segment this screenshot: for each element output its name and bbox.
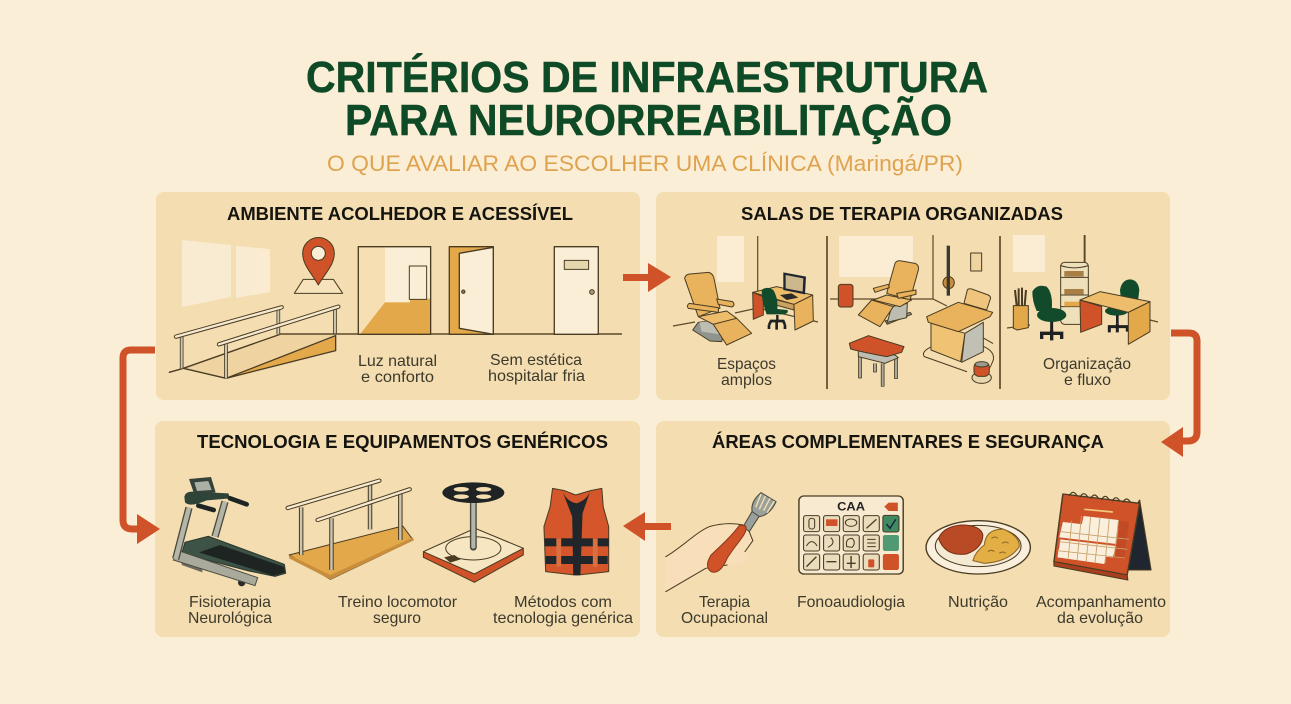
label: luz natural: Luz natural (358, 353, 437, 370)
label: fisioterapia neurológica: Fisioterapia (189, 594, 271, 611)
panel: áreas complementares e segurança (656, 421, 1170, 637)
label: fisioterapia neurológica: Neurológica (188, 610, 272, 627)
label: acompanhamento da evolução: da evolução (1057, 610, 1143, 627)
label: acompanhamento da evolução (1036, 594, 1166, 627)
icon: CAA communication board: CAA (837, 500, 865, 514)
heading: tecnologia: TECNOLOGIA E EQUIPAMENTOS GENÉRICOS (197, 431, 608, 452)
label: métodos com tecnologia genérica: Métodos com (514, 594, 612, 611)
arrow: ambiente to salas (623, 263, 671, 292)
icon: life vest (544, 488, 609, 575)
icon: CAA communication board (799, 496, 903, 574)
arrow: ambiente to tecnologia (123, 350, 160, 544)
panel: salas de terapia organizadas (656, 192, 1170, 400)
panel: ambiente acolhedor e acessível (156, 192, 640, 400)
icon: green office chair left (1032, 286, 1066, 340)
icon: red stool (849, 336, 904, 387)
arrow: salas to áreas (1161, 333, 1197, 457)
label: espaços amplos: amplos (721, 372, 772, 389)
title (306, 52, 988, 145)
title: PARA NEURORREABILITAÇÃO (345, 95, 952, 145)
icon: pencil cup (1013, 288, 1028, 330)
panel: tecnologia e equipamentos genéricos (155, 421, 640, 637)
icon: map pin (294, 237, 343, 293)
label: organização e fluxo: e fluxo (1064, 372, 1111, 389)
icon: plate of food (926, 521, 1030, 574)
label: métodos com tecnologia genérica: tecnologia genérica (493, 610, 633, 627)
illustration: room walls and windows (673, 235, 1158, 389)
label: treino locomotor seguro (338, 594, 458, 627)
heading: áreas: ÁREAS COMPLEMENTARES E SEGURANÇA (712, 431, 1104, 452)
icon: hand with adapted fork (666, 493, 776, 592)
label: luz natural: e conforto (361, 369, 434, 386)
label: sem estética: Sem estética (490, 352, 582, 369)
subtitle: O QUE AVALIAR AO ESCOLHER UMA CLÍNICA (Maringá/PR) (327, 151, 963, 176)
illustration: floor line (280, 333, 622, 335)
icon: balance wheel on platform (423, 482, 523, 582)
icon: exam table with pedal (923, 289, 994, 383)
label: espaços amplos: Espaços (717, 356, 776, 373)
icon: desk with computer (753, 272, 813, 330)
illustration: bright room (358, 247, 431, 334)
label: treino locomotor seguro: Treino locomotor (338, 594, 458, 611)
heading: salas: SALAS DE TERAPIA ORGANIZADAS (741, 203, 1063, 224)
label: fonoaudiologia: Fonoaudiologia (797, 594, 905, 611)
label: sem estética: hospitalar fria (488, 368, 585, 385)
label: espaços amplos (717, 356, 776, 389)
icon: shelf (1061, 235, 1088, 324)
icon: therapy chair (685, 272, 752, 345)
label: luz natural (358, 353, 437, 386)
label: treino locomotor seguro: seguro (373, 610, 421, 627)
illustration: windows (182, 240, 270, 307)
label: terapia ocupacional (681, 594, 768, 627)
icon: parallel bars (288, 481, 413, 579)
label: fisioterapia neurológica (188, 594, 272, 627)
icon: reclining chair and trash bin (838, 261, 919, 327)
illustration: closed door (554, 247, 598, 334)
title: CRITÉRIOS DE INFRAESTRUTURA (306, 52, 988, 102)
label: acompanhamento da evolução: Acompanhamento (1036, 594, 1166, 611)
illustration: accessible ramp (169, 307, 338, 378)
icon: treadmill (173, 477, 286, 586)
label: sem estética (488, 352, 585, 385)
heading: ambiente: AMBIENTE ACOLHEDOR E ACESSÍVEL (227, 203, 573, 224)
label: terapia ocupacional: Ocupacional (681, 610, 768, 627)
label: organização e fluxo: Organização (1043, 356, 1131, 373)
icon: wall rail and sign (943, 246, 982, 296)
label: terapia ocupacional: Terapia (699, 594, 750, 611)
label: organização e fluxo (1043, 356, 1131, 389)
illustration: open door (449, 247, 493, 334)
icon: desk with chair (1080, 279, 1150, 344)
label: métodos com tecnologia genérica (493, 594, 633, 627)
arrow: áreas to tecnologia (623, 512, 671, 541)
icon: desk calendar (1054, 492, 1151, 580)
label: nutrição: Nutrição (948, 594, 1008, 611)
